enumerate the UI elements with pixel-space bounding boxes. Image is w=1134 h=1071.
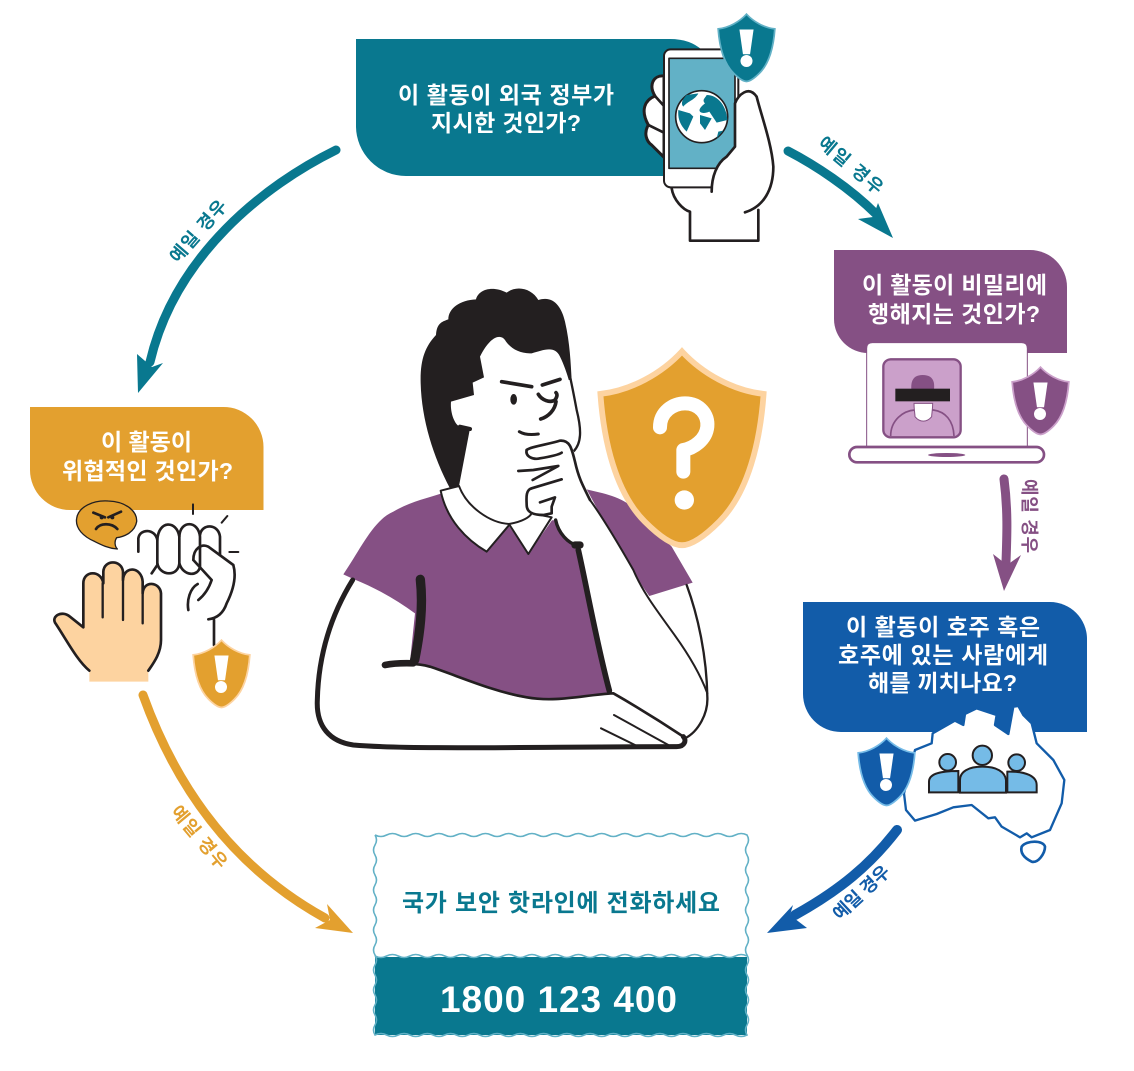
arrow: orange to hotline	[143, 695, 353, 933]
question text: 이 활동이 외국 정부가	[398, 82, 614, 108]
question text: 해를 끼치나요?	[868, 670, 1017, 696]
question text	[398, 82, 614, 136]
profile photo	[883, 359, 961, 437]
man: body and arm outlines	[317, 500, 707, 748]
large shield with question mark	[600, 351, 764, 545]
question text: 위협적인 것인가?	[62, 458, 233, 484]
icon: hand holding phone with globe	[644, 49, 773, 241]
man: face	[451, 337, 579, 523]
arrow label: 예일 경우	[829, 862, 894, 924]
hotline heading: 국가 보안 핫라인에 전화하세요	[402, 890, 720, 917]
man: hand on chin	[518, 441, 607, 543]
question text: 호주에 있는 사람에게	[838, 642, 1048, 668]
arrow label: 예일 경우	[167, 802, 231, 873]
icon: Australia map with people	[904, 706, 1064, 862]
thumb and palm	[712, 91, 773, 213]
question text: 지시한 것인가?	[431, 110, 581, 136]
question text	[62, 429, 233, 484]
arrow label: 예일 경우	[166, 196, 231, 267]
hotline number band	[375, 957, 747, 1035]
angry speech bubble	[76, 501, 137, 549]
arrow: teal to purple	[788, 133, 893, 238]
question text	[838, 614, 1048, 696]
man: shirt	[343, 489, 693, 699]
icon: purple warning shield	[1012, 367, 1069, 434]
phone	[664, 49, 738, 187]
man: collar	[441, 486, 552, 554]
clenched fist	[138, 504, 238, 645]
question text: 이 활동이 비밀리에	[862, 272, 1047, 298]
central figure: thinking man	[317, 289, 707, 748]
question mark	[660, 403, 707, 510]
icon: blue warning shield	[858, 738, 915, 805]
step 1: teal bubble	[356, 39, 702, 176]
question text: 행해지는 것인가?	[868, 301, 1040, 327]
raised open hand	[54, 562, 161, 682]
hotline box	[374, 834, 748, 1036]
icon: laptop with hidden identity	[849, 343, 1044, 462]
step 4: orange bubble	[30, 407, 264, 510]
question text	[862, 272, 1047, 327]
arrow: purple to blue	[993, 479, 1039, 591]
icon: fist, raised hand and angry face	[54, 501, 238, 682]
man: facial features	[460, 352, 580, 452]
globe	[676, 91, 728, 143]
arrow label: 예일 경우	[1019, 479, 1039, 553]
laptop base	[849, 447, 1044, 462]
hand back	[672, 187, 758, 241]
icon: teal warning shield	[718, 14, 775, 81]
people	[929, 746, 1037, 793]
arrow: blue to hotline	[767, 830, 897, 933]
map outline	[904, 706, 1064, 837]
Tasmania	[1021, 842, 1045, 862]
step 2: purple bubble	[834, 250, 1067, 353]
step 3: blue bubble	[803, 602, 1087, 732]
man: hair	[421, 289, 572, 488]
wavy border	[374, 834, 748, 1036]
question text: 이 활동이 호주 혹은	[846, 614, 1040, 640]
arrow: orange to teal	[137, 150, 336, 393]
laptop screen	[867, 343, 1027, 447]
arrow label: 예일 경우	[814, 133, 887, 198]
phone number: 1800 123 400	[440, 979, 677, 1020]
question text: 이 활동이	[101, 429, 192, 455]
icon: orange warning shield	[193, 640, 250, 707]
fingers	[644, 76, 664, 157]
